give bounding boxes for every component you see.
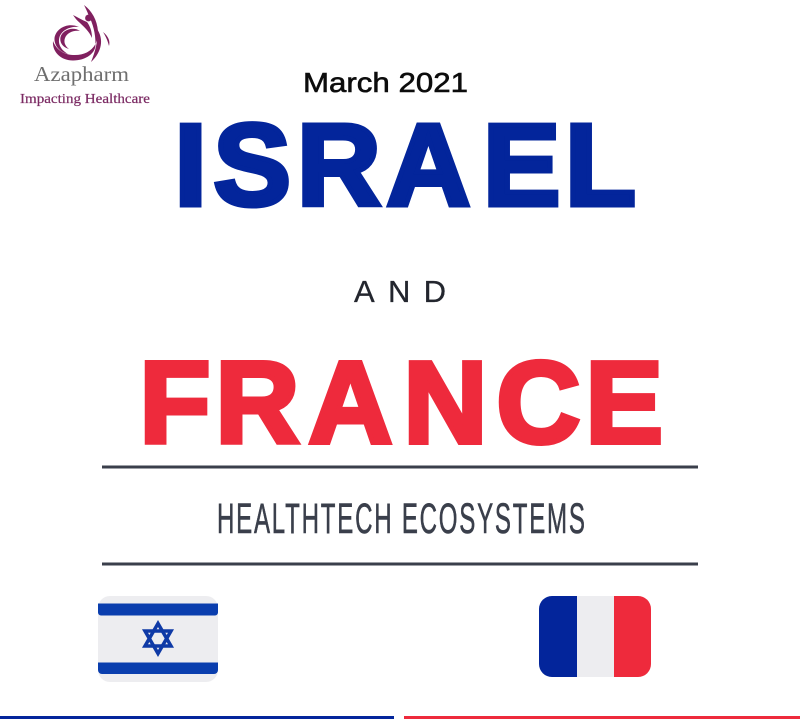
footer bar: red: [404, 716, 800, 719]
icon: dancing figure with swirls: [53, 5, 109, 62]
icon: France flag: [539, 596, 651, 677]
date: March 2021: [303, 67, 468, 98]
bottom divider: [102, 562, 698, 566]
star of David: [145, 624, 171, 654]
logo wordmark: Azapharm: [34, 62, 129, 86]
logo tagline: Impacting Healthcare: [20, 91, 150, 106]
connector word: AND: AND: [354, 274, 446, 309]
title: ISRAEL: ISRAEL: [174, 100, 636, 230]
top divider: [102, 466, 698, 468]
logo: Azapharm: [20, 5, 150, 106]
subtitle: HEALTHTECH ECOSYSTEMS: [217, 495, 585, 543]
icon: Israel flag: [98, 596, 218, 682]
title: FRANCE: FRANCE: [140, 338, 663, 468]
footer bar: blue: [0, 716, 394, 719]
